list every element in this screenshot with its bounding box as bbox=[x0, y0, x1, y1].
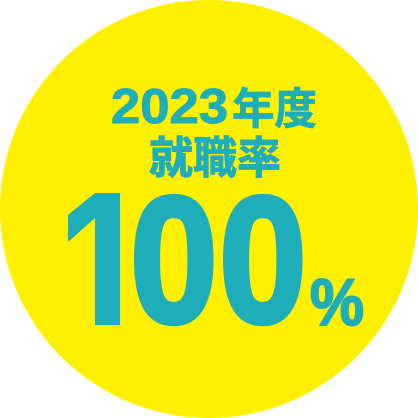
heading: employment rate: 就職率 bbox=[149, 134, 281, 183]
heading: 2023 fiscal year bbox=[111, 80, 317, 134]
big number: 100: 1 bbox=[50, 154, 150, 366]
big number: 100: 0 bbox=[130, 159, 218, 360]
big number: 100: 0 bbox=[219, 159, 307, 360]
heading: 2023 fiscal year: 年度 bbox=[232, 86, 317, 134]
percent sign: % bbox=[310, 265, 364, 339]
heading: 2023 fiscal year: 2023 bbox=[111, 80, 228, 134]
big number: 100 bbox=[68, 193, 302, 326]
